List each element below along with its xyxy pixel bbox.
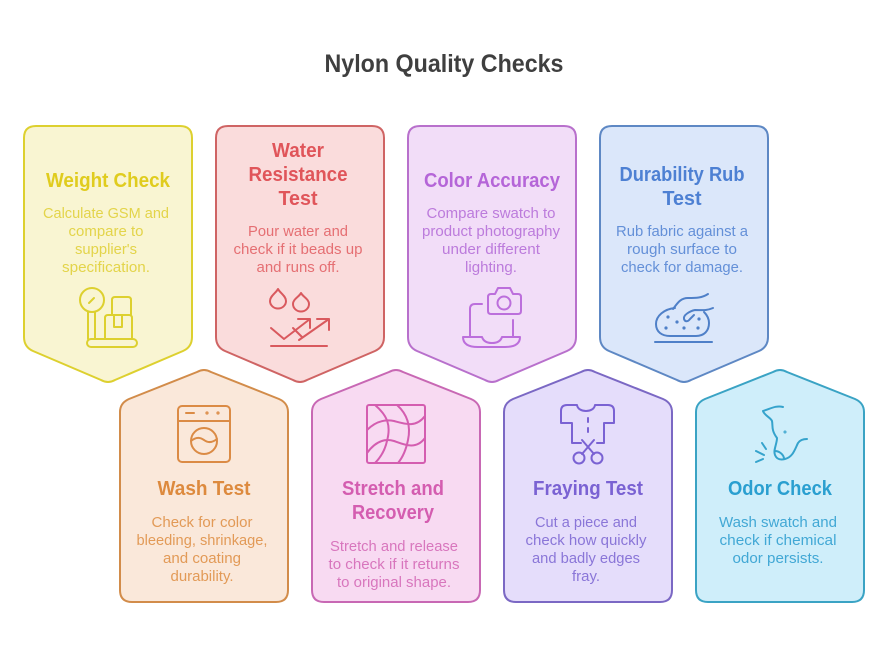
icon: water drops and arrows xyxy=(270,289,329,346)
panel: water resistance test xyxy=(216,126,384,382)
panel: wash test xyxy=(120,370,288,602)
description xyxy=(43,206,169,276)
card shape xyxy=(24,126,192,382)
description xyxy=(234,224,362,276)
description: under different xyxy=(442,242,540,258)
heading: Weight Check xyxy=(46,170,171,192)
description: to check if it returns xyxy=(328,557,460,573)
panel: stretch and recovery xyxy=(312,370,480,602)
panel: fraying test xyxy=(504,370,672,602)
card shape xyxy=(216,126,384,382)
panel: weight check xyxy=(24,126,192,382)
description xyxy=(616,224,749,276)
description: bleeding, shrinkage, xyxy=(136,533,268,549)
icon: nose smelling xyxy=(756,406,807,462)
description: and badly edges xyxy=(532,551,640,567)
heading: Color Accuracy xyxy=(424,170,561,192)
heading xyxy=(248,140,348,210)
panel: color accuracy xyxy=(408,126,576,382)
icon: rubbing a sponge xyxy=(655,294,713,342)
description: Cut a piece and xyxy=(535,515,637,531)
description: odor persists. xyxy=(732,551,824,567)
heading: Fraying Test xyxy=(533,478,643,500)
panel: durability rub test xyxy=(600,126,768,382)
description: check if it beads up xyxy=(234,242,362,258)
heading xyxy=(342,478,444,524)
heading: Test xyxy=(662,188,702,210)
description: product photography xyxy=(422,224,561,240)
description: rough surface to xyxy=(627,242,737,258)
description xyxy=(136,515,268,585)
description: durability. xyxy=(170,569,234,585)
description: Pour water and xyxy=(248,224,348,240)
icon: shirt and scissors xyxy=(561,405,614,464)
card shape xyxy=(120,370,288,602)
description: Compare swatch to xyxy=(426,206,556,222)
description: Rub fabric against a xyxy=(616,224,749,240)
description: supplier's xyxy=(75,242,137,258)
card shape xyxy=(600,126,768,382)
description xyxy=(526,515,647,585)
card shape xyxy=(504,370,672,602)
description xyxy=(422,206,561,276)
description: fray. xyxy=(572,569,600,585)
heading: Odor Check xyxy=(728,478,833,500)
icon: camera and laptop xyxy=(463,288,521,347)
description: and coating xyxy=(163,551,241,567)
description: check if chemical xyxy=(720,533,836,549)
description: check how quickly xyxy=(526,533,647,549)
card shape xyxy=(696,370,864,602)
heading: Test xyxy=(278,188,318,210)
description: Calculate GSM and xyxy=(43,206,169,222)
title: Nylon Quality Checks xyxy=(324,50,564,78)
description: Check for color xyxy=(152,515,253,531)
description: Stretch and release xyxy=(330,539,458,555)
description: Wash swatch and xyxy=(719,515,837,531)
description: specification. xyxy=(62,260,150,276)
heading xyxy=(620,164,744,210)
description: compare to xyxy=(68,224,144,240)
heading: Water xyxy=(272,140,324,162)
description xyxy=(719,515,837,567)
card shape xyxy=(408,126,576,382)
heading: Wash Test xyxy=(158,478,251,500)
description: lighting. xyxy=(465,260,517,276)
card shape xyxy=(312,370,480,602)
panel: odor check xyxy=(696,370,864,602)
heading: Durability Rub xyxy=(620,164,744,186)
heading: Stretch and xyxy=(342,478,444,500)
description: to original shape. xyxy=(337,575,451,591)
description: check for damage. xyxy=(621,260,743,276)
heading: Recovery xyxy=(352,502,435,524)
icon: scale with box xyxy=(80,288,137,347)
heading: Resistance xyxy=(248,164,348,186)
icon: washing machine xyxy=(178,406,230,462)
description: and runs off. xyxy=(256,260,340,276)
description xyxy=(328,539,460,591)
icon: stretched fabric xyxy=(367,405,425,463)
